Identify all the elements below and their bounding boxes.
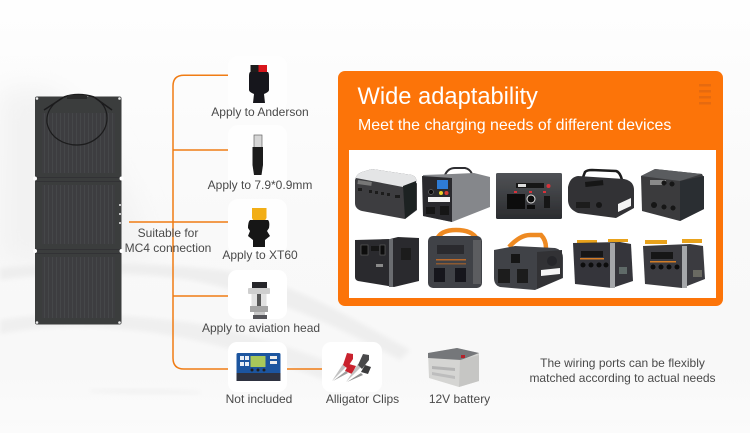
panel: wide adaptability bbox=[338, 71, 723, 306]
note: wiring ports: matched according to actual needs bbox=[529, 371, 716, 385]
item: aviation head bbox=[202, 270, 320, 335]
item: 12V battery: 12V battery bbox=[429, 392, 490, 406]
heading: Wide adaptability bbox=[358, 84, 538, 110]
label: MC4 connection: Suitable for bbox=[138, 226, 198, 240]
solar panel bbox=[33, 94, 124, 324]
icon: clips bbox=[332, 353, 371, 382]
icon: battery bbox=[428, 348, 479, 387]
device 2 bbox=[422, 168, 490, 222]
item: XT60 connector bbox=[222, 199, 298, 262]
item: charge controller: Not included bbox=[226, 392, 292, 406]
device 9 bbox=[573, 239, 633, 288]
MC4 cable loop bbox=[44, 94, 112, 145]
device 6 bbox=[355, 237, 419, 287]
item: aviation head: Apply to aviation head bbox=[202, 321, 320, 335]
item: alligator clips: Alligator Clips bbox=[326, 392, 399, 406]
item: 7.9*0.9mm connector bbox=[208, 125, 312, 192]
device 8 bbox=[494, 235, 563, 290]
icon: menu bbox=[699, 84, 711, 104]
device grid bbox=[349, 150, 716, 298]
label: MC4 connection: MC4 connection bbox=[125, 241, 211, 255]
panel sections bbox=[33, 96, 124, 324]
device 5 bbox=[641, 169, 704, 221]
item: Anderson connector bbox=[211, 56, 309, 119]
device 3 bbox=[496, 173, 562, 219]
device 7 bbox=[428, 230, 482, 288]
item: 7.9*0.9mm connector: Apply to 7.9*0.9mm bbox=[208, 178, 312, 192]
item: 12V battery bbox=[428, 348, 490, 406]
item: XT60 connector: Apply to XT60 bbox=[222, 248, 298, 262]
subheading: Meet the charging needs of different devices bbox=[358, 117, 671, 134]
connector lines bbox=[129, 75, 322, 369]
note: wiring ports: The wiring ports can be flexibly bbox=[540, 356, 705, 370]
icon: Anderson plug bbox=[249, 65, 269, 103]
label: MC4 connection bbox=[125, 226, 211, 255]
item: charge controller bbox=[226, 342, 292, 406]
note: wiring ports bbox=[529, 356, 716, 385]
device 10 bbox=[643, 239, 705, 288]
item: Anderson connector: Apply to Anderson bbox=[211, 105, 309, 119]
icon: aviation connector bbox=[248, 282, 270, 319]
device 4 bbox=[568, 170, 634, 218]
icon: solar controller bbox=[236, 353, 280, 381]
icon: DC barrel plug bbox=[252, 135, 263, 175]
device 1 bbox=[355, 169, 417, 219]
item: alligator clips bbox=[322, 342, 399, 406]
icon: XT60 plug bbox=[248, 208, 270, 247]
